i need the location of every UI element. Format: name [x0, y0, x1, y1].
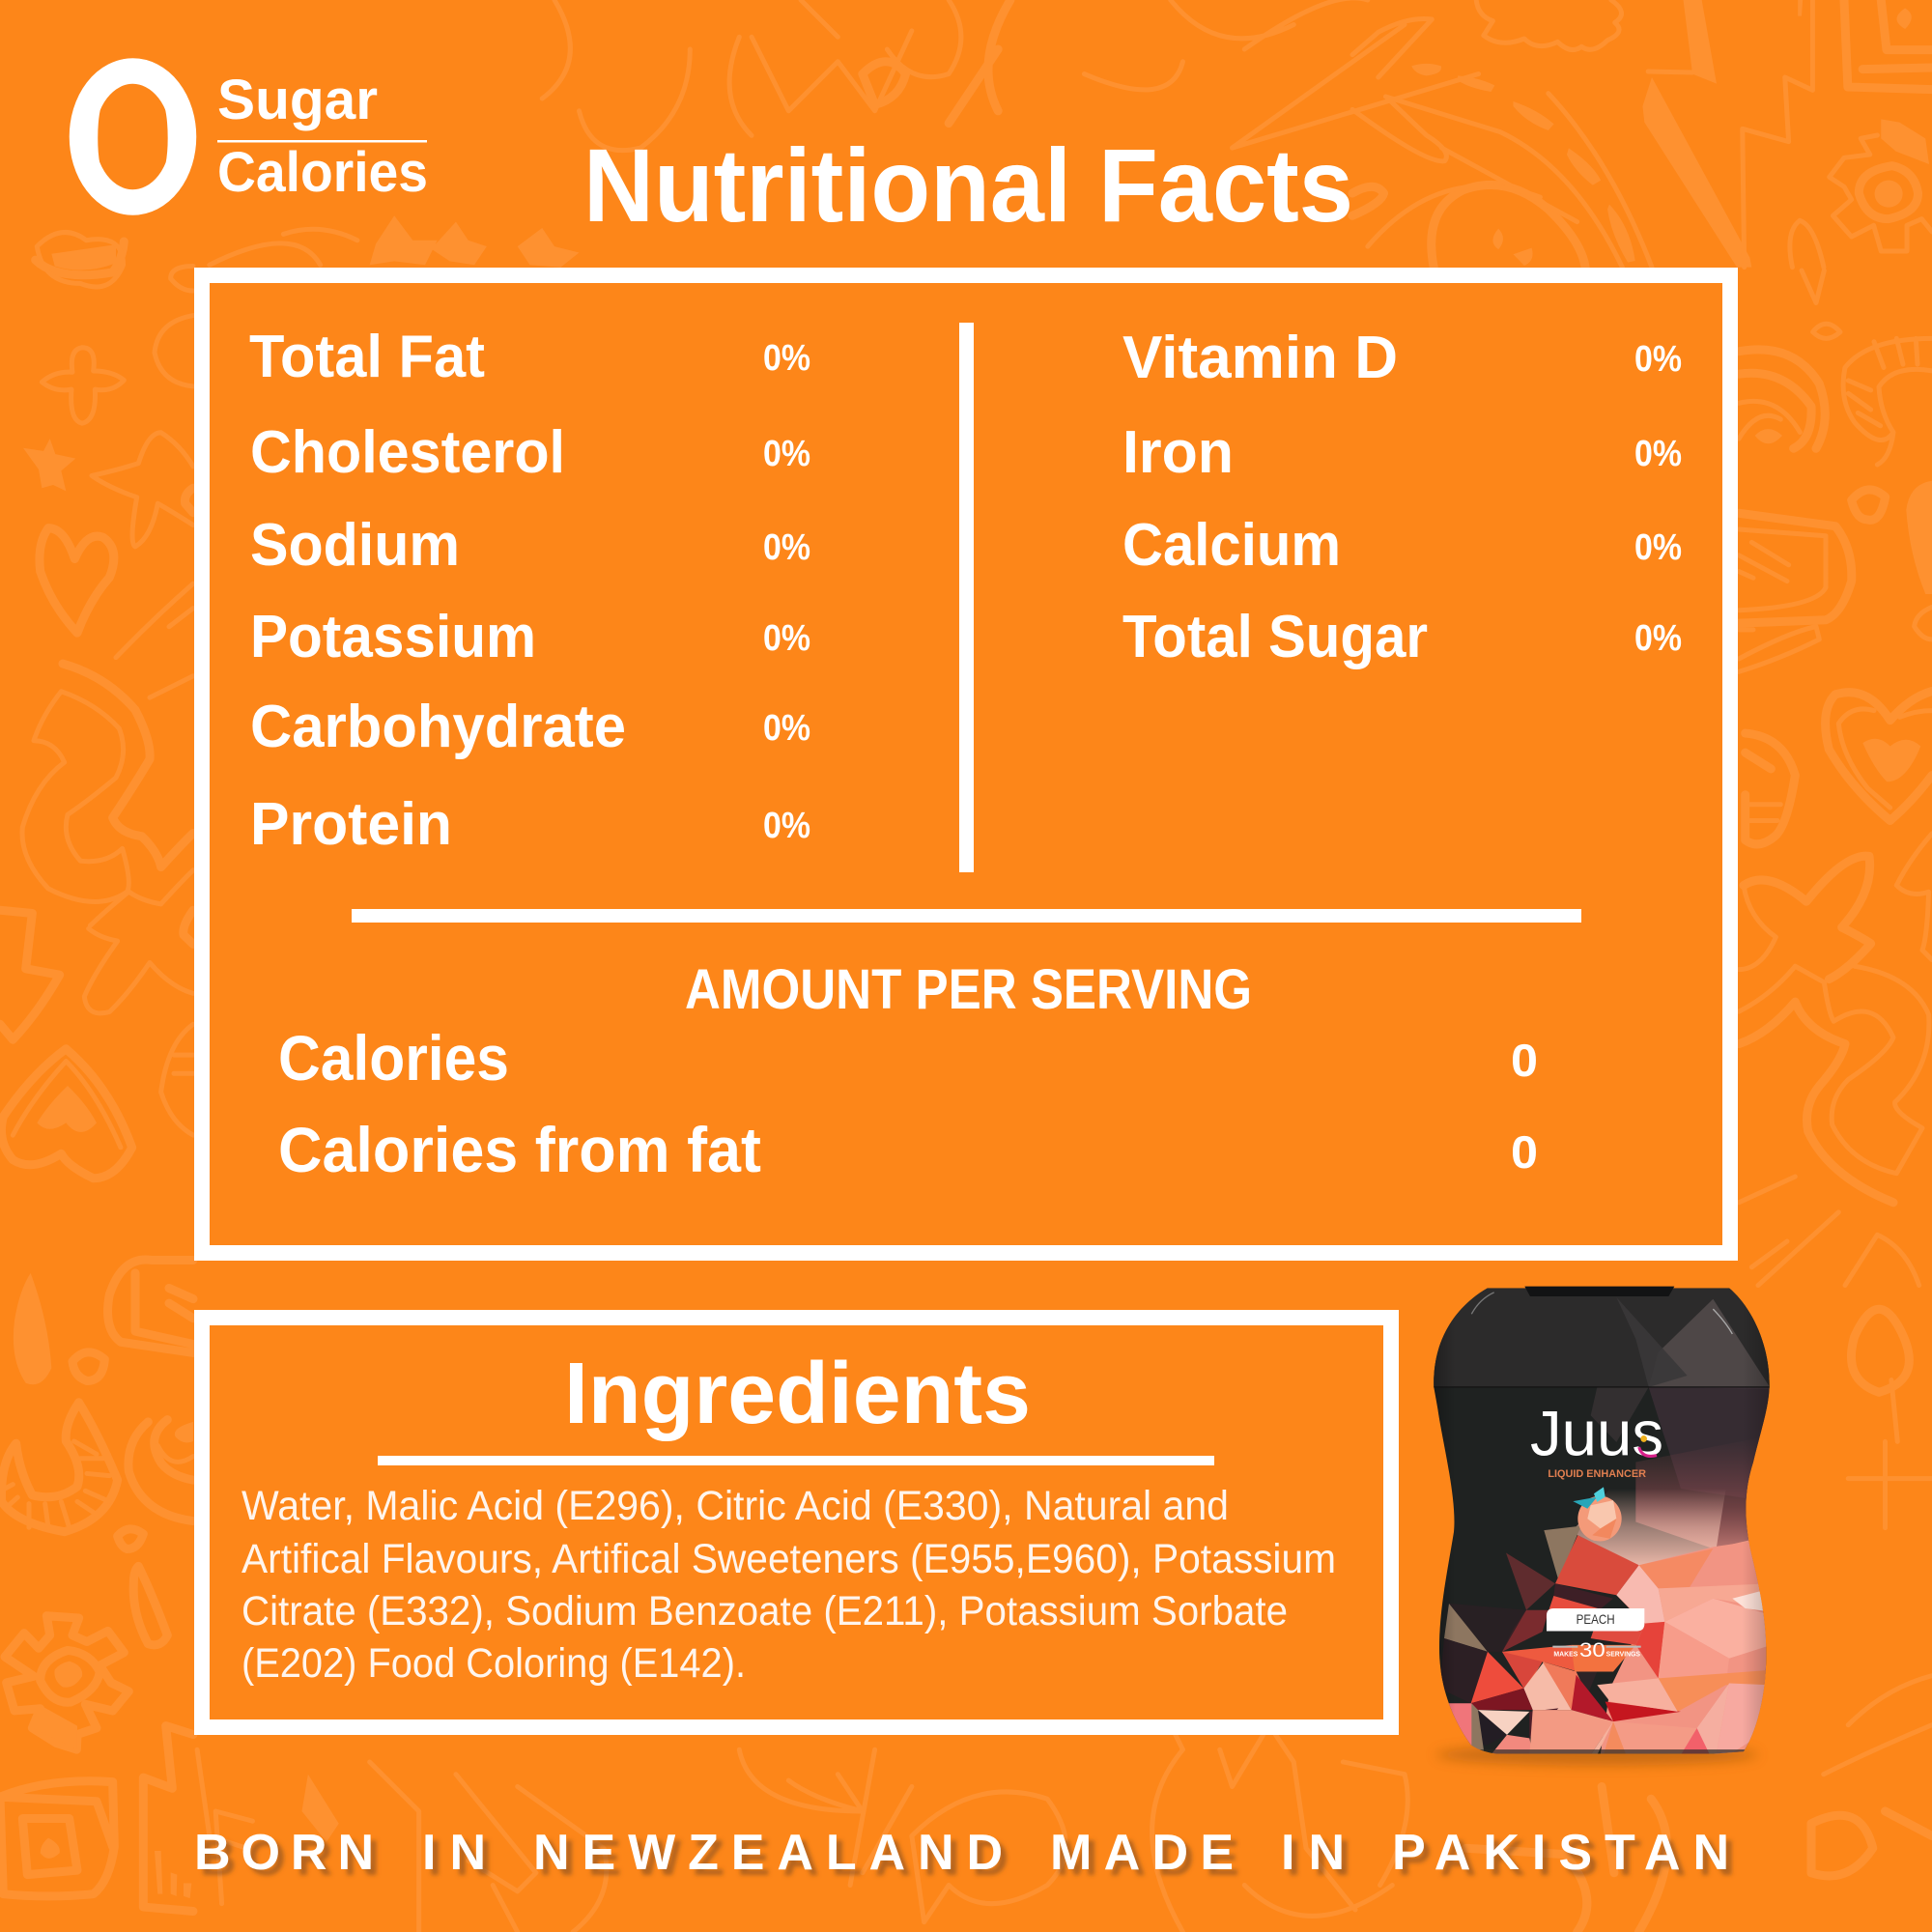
row: Total Fat: [249, 324, 810, 390]
row: Sodium: Sodium: [250, 512, 460, 579]
footer tagline: [194, 1825, 1729, 1881]
flavour pill: [1547, 1608, 1644, 1631]
footer tagline: PAKISTAN: [1392, 1825, 1729, 1881]
label: liquid enhancer: LIQUID ENHANCER: [1548, 1468, 1646, 1480]
servings label: 30: [1579, 1639, 1605, 1662]
panel: ingredients: [202, 1318, 1391, 1727]
row: Carbohydrate: Carbohydrate: [250, 694, 626, 760]
background doodle pattern: bottom left: [0, 1260, 193, 1912]
big zero: 0: [68, 24, 198, 253]
horizontal divider: [352, 909, 1581, 923]
row: Calories from fat: Calories from fat: [278, 1114, 761, 1185]
row: Total Sugar: [1122, 604, 1682, 670]
footer tagline: IN: [1281, 1825, 1345, 1881]
row: Iron: [1122, 419, 1682, 486]
title: Nutritional Facts: [583, 127, 1353, 243]
bottle colour fade: [1635, 1447, 1756, 1553]
product bottle: [1423, 1283, 1777, 1766]
ingredients list: Artifical Flavours, Artifical Sweeteners (E955,E960), Potassium: [242, 1536, 1336, 1582]
row: Protein: 0%: [763, 806, 810, 846]
row: Potassium: Potassium: [250, 604, 536, 670]
brand logo: Juus: [1530, 1399, 1663, 1469]
row: Calcium: [1122, 512, 1682, 579]
row: Potassium: [250, 604, 810, 670]
logo divider: [217, 140, 427, 143]
row: Protein: Protein: [250, 791, 452, 858]
row: Total Sugar: 0%: [1634, 618, 1682, 659]
heading: amount per serving: AMOUNT PER SERVING: [685, 958, 1252, 1021]
bottle shadow: [1436, 1745, 1758, 1766]
row: Calories: Calories: [278, 1022, 509, 1094]
servings label: MAKES: [1553, 1652, 1578, 1659]
ingredients heading: Ingredients: [564, 1346, 1031, 1442]
row: Cholesterol: Cholesterol: [250, 419, 565, 486]
ingredients frame: [202, 1318, 1391, 1727]
word: Calories: Calories: [217, 141, 428, 204]
background doodle pattern: top right: [1352, 0, 1932, 268]
row: Vitamin D: [1122, 325, 1682, 391]
servings label: SERVINGS: [1606, 1652, 1640, 1659]
row: Calories from fat: 0: [1511, 1126, 1538, 1178]
row: Carbohydrate: 0%: [763, 708, 810, 749]
bottle shading: [1434, 1347, 1770, 1746]
panel frame: [202, 275, 1730, 1253]
row: Total Fat: Total Fat: [249, 324, 485, 390]
icon: peach: [1573, 1487, 1622, 1541]
servings label: [1552, 1639, 1641, 1662]
ingredients list: (E202) Food Coloring (E142).: [242, 1640, 746, 1687]
row: Cholesterol: 0%: [763, 434, 810, 474]
vertical divider: [959, 323, 974, 872]
row: Iron: Iron: [1122, 419, 1234, 486]
footer tagline: NEWZEALAND: [533, 1825, 1003, 1881]
heading rule: [378, 1456, 1214, 1465]
row: Cholesterol: [250, 419, 810, 486]
row: Sodium: 0%: [763, 527, 810, 568]
row: Protein: [250, 791, 810, 858]
row: Iron: 0%: [1634, 434, 1682, 474]
row: Vitamin D: 0%: [1634, 339, 1682, 380]
row: Potassium: 0%: [763, 618, 810, 659]
footer tagline: BORN: [194, 1825, 374, 1881]
row: Carbohydrate: [250, 694, 810, 760]
logo: 0 sugar 0 calories: [68, 24, 428, 253]
row: Calories: 0: [1511, 1035, 1538, 1086]
panel: nutrition facts: [202, 275, 1730, 1253]
row: Total Sugar: Total Sugar: [1122, 604, 1428, 670]
background doodle pattern: left column: [0, 242, 193, 1179]
ingredients list: Citrate (E332), Sodium Benzoate (E211), Potassium Sorbate: [242, 1588, 1288, 1634]
bottle lid highlight: [1524, 1287, 1674, 1296]
ingredients list: Water, Malic Acid (E296), Citric Acid (E330), Natural and: [242, 1483, 1229, 1529]
footer tagline: MADE: [1050, 1825, 1234, 1881]
row: Calcium: 0%: [1634, 527, 1682, 568]
ingredients list: [242, 1483, 1336, 1687]
footer tagline: IN: [422, 1825, 486, 1881]
row: Total Fat: 0%: [763, 338, 810, 379]
row: Sodium: [250, 512, 810, 579]
row: Calories from fat: [278, 1114, 1538, 1185]
row: Calories: [278, 1022, 1538, 1094]
bottle body: [1423, 1283, 1777, 1761]
flavour pill: PEACH: [1577, 1612, 1615, 1627]
word: Sugar: Sugar: [217, 69, 378, 131]
background doodle pattern: right column: [1739, 270, 1932, 1286]
row: Calcium: Calcium: [1122, 512, 1341, 579]
row: Vitamin D: Vitamin D: [1122, 325, 1398, 391]
